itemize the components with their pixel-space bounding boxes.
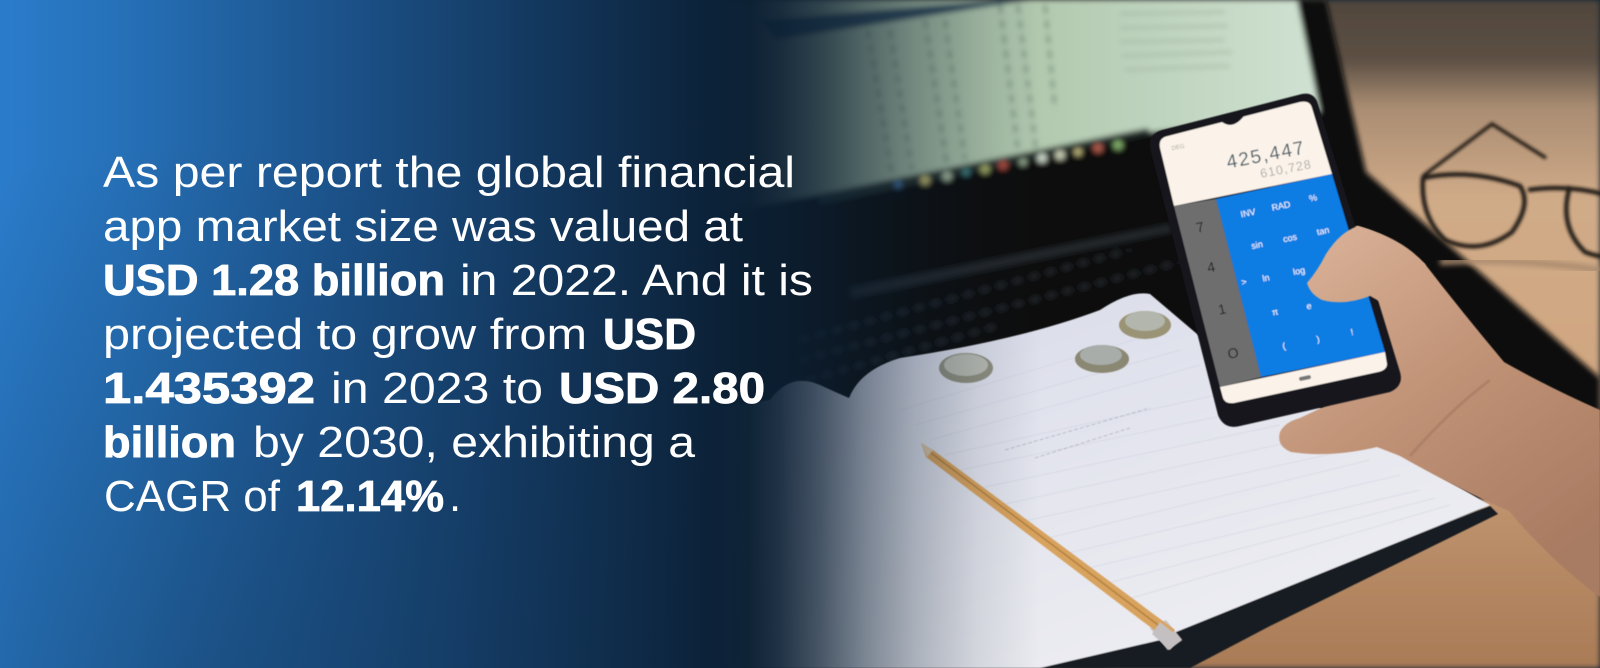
- glasses shadow: [1440, 261, 1600, 270]
- scientific keys: RAD: [1271, 199, 1292, 213]
- number keys: 4: [1206, 258, 1217, 276]
- calculator display: 610,728: [1259, 157, 1313, 181]
- blue gradient overlay: [0, 0, 1040, 668]
- notebook: [500, 293, 1498, 668]
- scientific keys: >: [1240, 277, 1248, 287]
- number keys: 1: [1217, 300, 1228, 318]
- paragraph text: [103, 149, 813, 521]
- pencil: [921, 443, 1180, 650]
- laptop screen: [700, 0, 1320, 215]
- scientific keys: e: [1306, 301, 1312, 311]
- paragraph text: USD 1.28 billion: [103, 257, 445, 305]
- scientific keys: [1240, 192, 1354, 351]
- keyboard keys: [790, 250, 1180, 385]
- phone grey keypad: [1174, 199, 1261, 387]
- spreadsheet rows: [868, 5, 1055, 175]
- paragraph text: 12.14%: [296, 473, 444, 521]
- paragraph text: in 2023 to: [331, 365, 543, 413]
- spine: [1150, 620, 1182, 650]
- scientific keys: sin: [1250, 239, 1264, 251]
- number keys: 7: [1195, 218, 1206, 236]
- scientific keys: ln: [1262, 272, 1270, 284]
- photo: desk scene: [500, 0, 1600, 668]
- glasses on table: [1423, 124, 1600, 256]
- paragraph text: projected to grow from: [103, 311, 587, 359]
- number keys: O: [1226, 344, 1240, 362]
- hand: [1279, 226, 1600, 597]
- paragraph text: billion: [103, 419, 236, 467]
- home indicator: [1299, 375, 1311, 381]
- paragraph text: in 2022. And it is: [460, 257, 813, 305]
- scientific keys: %: [1308, 192, 1318, 204]
- laptop: [600, 0, 1600, 668]
- calculator display: 425,447: [1225, 138, 1307, 173]
- phone screen bottom: [1220, 352, 1387, 403]
- scientific keys: cos: [1282, 232, 1298, 244]
- coin 1: [939, 353, 993, 383]
- paragraph text: 1.435392: [103, 365, 315, 413]
- scientific keys: !: [1350, 327, 1354, 337]
- number keys: [1195, 218, 1240, 362]
- scientific keys: log: [1292, 265, 1306, 277]
- paragraph text: by 2030, exhibiting a: [253, 419, 696, 467]
- laptop hinge: [849, 224, 1172, 298]
- lower left shading: [0, 0, 900, 668]
- paragraph text: .: [449, 473, 461, 521]
- paragraph text: CAGR of: [104, 473, 281, 521]
- calculator display: DEG: [1171, 144, 1185, 152]
- taskbar icons: [818, 128, 1150, 204]
- notebook left and main pages: [500, 293, 1490, 668]
- coin 3: [1119, 311, 1171, 339]
- ruled lines: [900, 335, 1450, 600]
- paragraph text: As per report the global financial: [103, 149, 795, 197]
- scientific keys: (: [1281, 341, 1287, 351]
- notes column on screen: [1120, 12, 1232, 70]
- camera notch: [1222, 116, 1244, 125]
- smartphone: [1150, 94, 1401, 427]
- paragraph text: USD: [603, 311, 696, 359]
- handwriting: [1005, 408, 1150, 458]
- scientific keys: INV: [1240, 207, 1256, 219]
- phone blue keypad: [1216, 174, 1385, 377]
- phone screen top: [1160, 102, 1332, 206]
- paragraph text: USD 2.80: [559, 365, 765, 413]
- wooden table: [600, 0, 1600, 668]
- notebook cover and page stack: [1040, 506, 1498, 668]
- scientific keys: ): [1315, 334, 1321, 344]
- paragraph text: app market size was valued at: [103, 203, 743, 251]
- thumb over phone: [1307, 226, 1440, 330]
- coin 2: [1075, 345, 1129, 373]
- scientific keys: π: [1271, 306, 1279, 318]
- calculator display: [1171, 138, 1313, 181]
- scientific keys: tan: [1316, 225, 1330, 237]
- phone body: [1150, 94, 1401, 427]
